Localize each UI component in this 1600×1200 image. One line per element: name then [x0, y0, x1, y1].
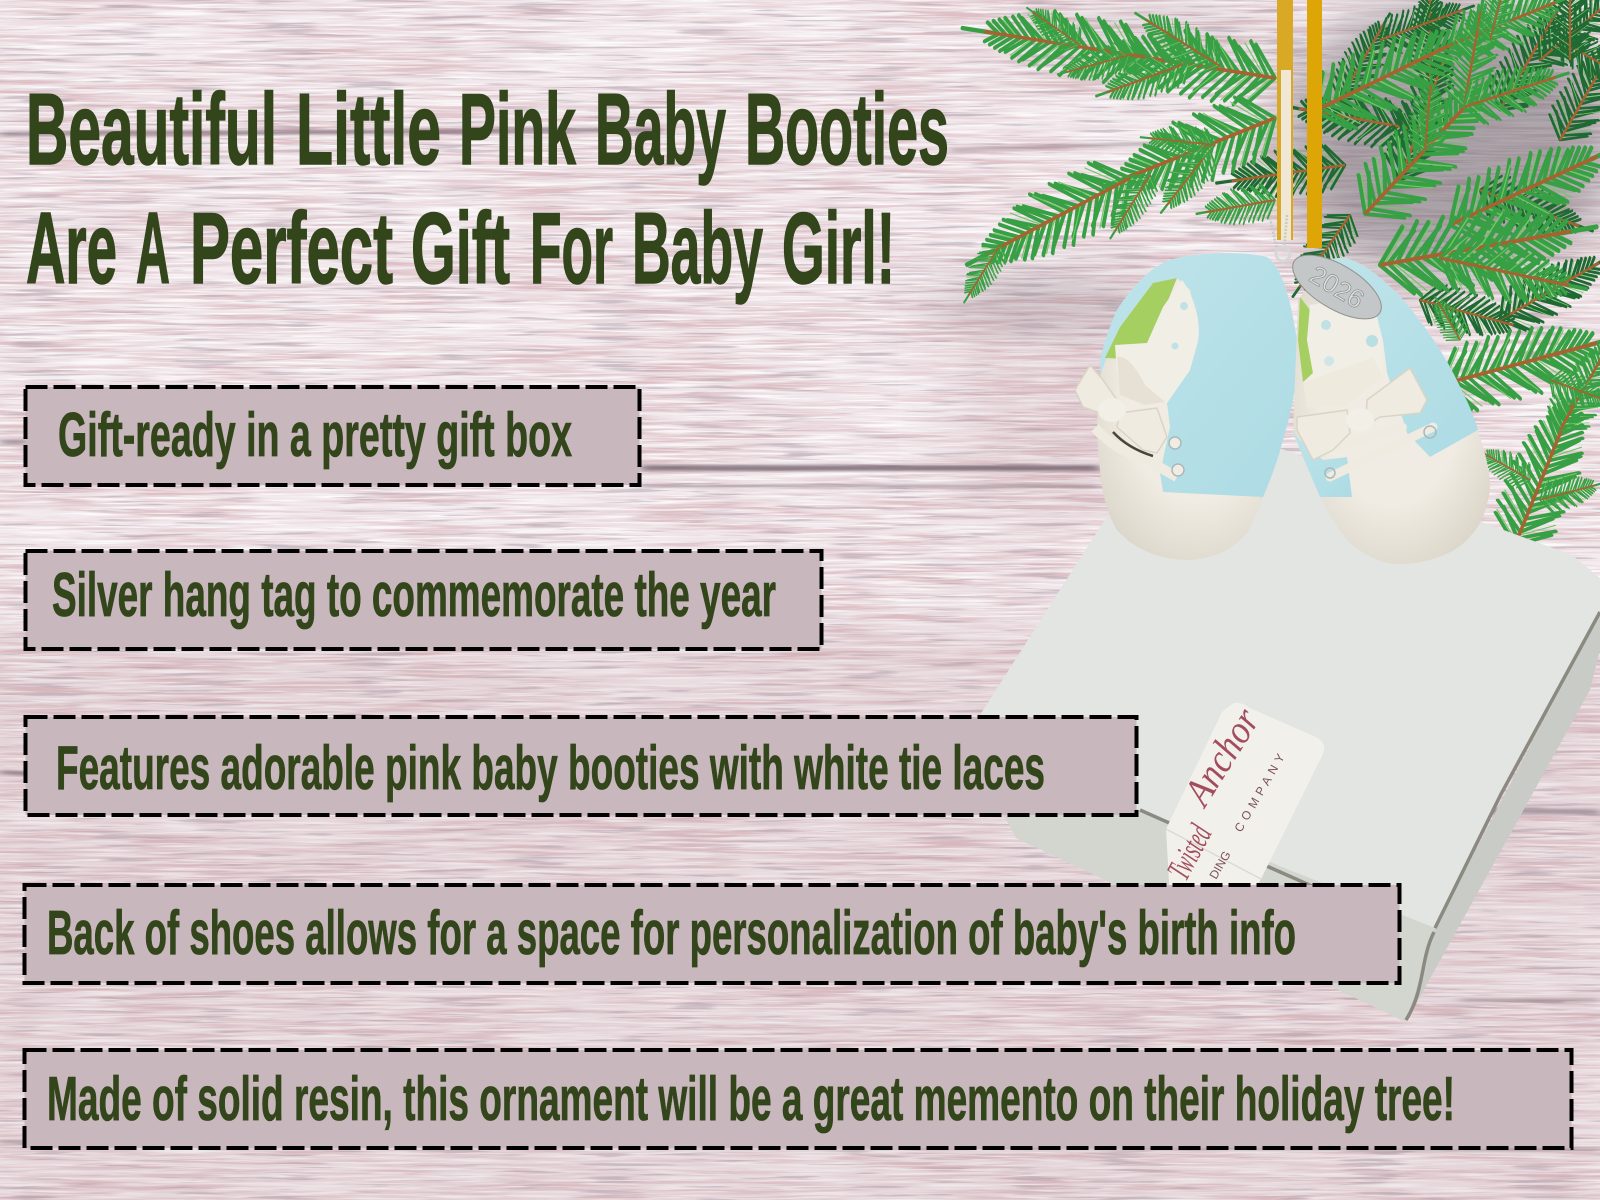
title: Girl! — [782, 193, 895, 305]
box: top face — [964, 410, 1600, 928]
sticker with brand name: COMPANY — [1231, 751, 1288, 834]
feature box 2 — [26, 551, 822, 649]
feature box 1 — [26, 387, 640, 485]
title: A — [136, 193, 170, 305]
silver year tag — [1276, 242, 1391, 332]
sticker with brand name — [1160, 700, 1324, 900]
title — [26, 74, 949, 305]
box: right side — [1406, 612, 1600, 1022]
box: front side — [964, 740, 1435, 1022]
feature box 5 — [24, 1050, 1572, 1148]
feature box 1: Gift-ready in a pretty gift box — [58, 401, 572, 470]
title: Pink — [459, 74, 576, 186]
title: Gift — [411, 193, 510, 305]
feature box 2: Silver hang tag to commemorate the year — [52, 561, 776, 630]
sticker with brand name: Twisted — [1160, 818, 1220, 886]
box: dark edges — [1140, 612, 1600, 1020]
left bootie — [1075, 253, 1297, 560]
feature box 3 — [26, 717, 1136, 815]
right bootie — [1292, 258, 1490, 564]
pine branches, top right — [951, 0, 1600, 557]
silver year tag: 2026 — [1304, 259, 1370, 315]
feature box 4 — [24, 885, 1400, 983]
title: Perfect — [190, 193, 393, 305]
title: Little — [296, 74, 441, 186]
title: Booties — [745, 74, 949, 186]
gift box — [964, 410, 1600, 1022]
title: Baby — [595, 74, 726, 186]
sticker with brand name: Anchor — [1173, 700, 1268, 815]
gold ribbon hanger — [1270, 0, 1322, 250]
title: Baby — [632, 193, 763, 305]
title: Beautiful — [26, 74, 277, 186]
title: Are — [26, 193, 117, 305]
wood shadow under branches — [930, 0, 1600, 316]
sticker with brand name: DING — [1206, 849, 1234, 882]
ornament: baby booties — [1075, 242, 1490, 564]
title: For — [530, 193, 613, 305]
